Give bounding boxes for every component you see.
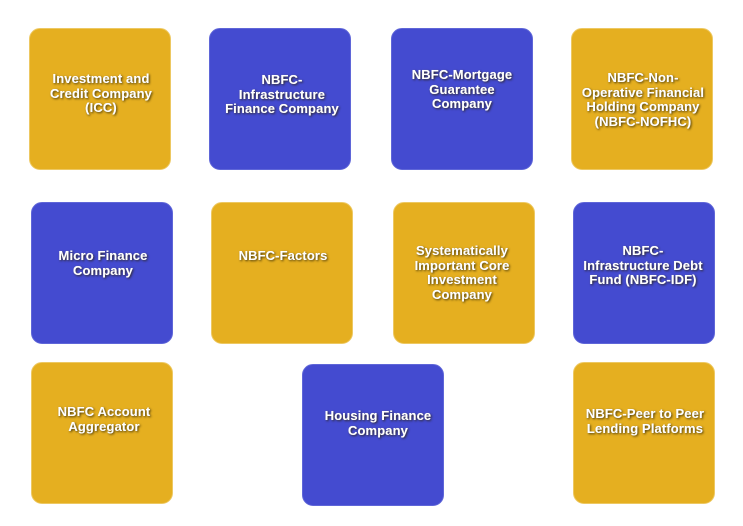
label: Company <box>432 286 492 302</box>
label: Finance Company <box>225 101 339 116</box>
card: Housing Finance Company <box>302 364 444 506</box>
label: NBFC-Peer to Peer <box>586 406 704 421</box>
label <box>58 248 150 280</box>
card: NBFC-Infrastructure Finance Company <box>209 28 351 170</box>
label: NBFC-Non- <box>607 70 679 85</box>
label: Investment <box>427 272 497 287</box>
label <box>50 71 154 117</box>
card: NBFC-Factors <box>211 202 353 344</box>
label: NBFC- <box>261 72 303 87</box>
label: Credit Company <box>50 86 152 100</box>
card: Micro Finance Company <box>31 202 173 344</box>
label: NBFC Account <box>58 404 150 419</box>
label: NBFC-Mortgage <box>412 67 512 82</box>
card: NBFC-Non-Operative Financial Holding Company <box>571 28 713 170</box>
card: NBFC-Peer to Peer Lending Platforms <box>573 362 715 504</box>
label: Infrastructure <box>239 86 325 102</box>
label: Important Core <box>415 258 509 272</box>
label <box>412 67 514 113</box>
label: Systematically <box>416 243 508 258</box>
card: NBFC-Mortgage Guarantee Company <box>391 28 533 170</box>
label: Micro Finance <box>59 248 147 263</box>
label: Company <box>348 422 408 438</box>
label <box>582 70 706 131</box>
label <box>586 406 706 438</box>
label: Guarantee <box>429 82 495 96</box>
label: Housing Finance <box>325 408 431 423</box>
label: (NBFC-NOFHC) <box>595 114 691 128</box>
card: NBFC-Infrastructure Debt Fund <box>573 202 715 344</box>
label: Company <box>432 96 492 111</box>
label <box>324 408 433 440</box>
label <box>414 243 512 304</box>
label: Fund (NBFC-IDF) <box>589 272 697 287</box>
label: Investment and <box>52 71 150 86</box>
card: NBFC Account Aggregator <box>31 362 173 504</box>
card: Investment and Credit Company <box>29 28 171 170</box>
label: Aggregator <box>68 418 140 434</box>
label: Operative Financial <box>582 84 704 100</box>
label <box>225 72 341 118</box>
label: Lending Platforms <box>587 420 703 436</box>
label <box>583 243 705 289</box>
label: NBFC- <box>622 243 664 258</box>
label: NBFC-Factors <box>239 248 327 263</box>
label: Infrastructure Debt <box>583 258 703 272</box>
label <box>58 404 152 436</box>
label: (ICC) <box>85 100 117 115</box>
card: Systematically Important Core Investment Company <box>393 202 535 344</box>
label: Company <box>73 262 133 278</box>
label: Holding Company <box>586 99 700 114</box>
